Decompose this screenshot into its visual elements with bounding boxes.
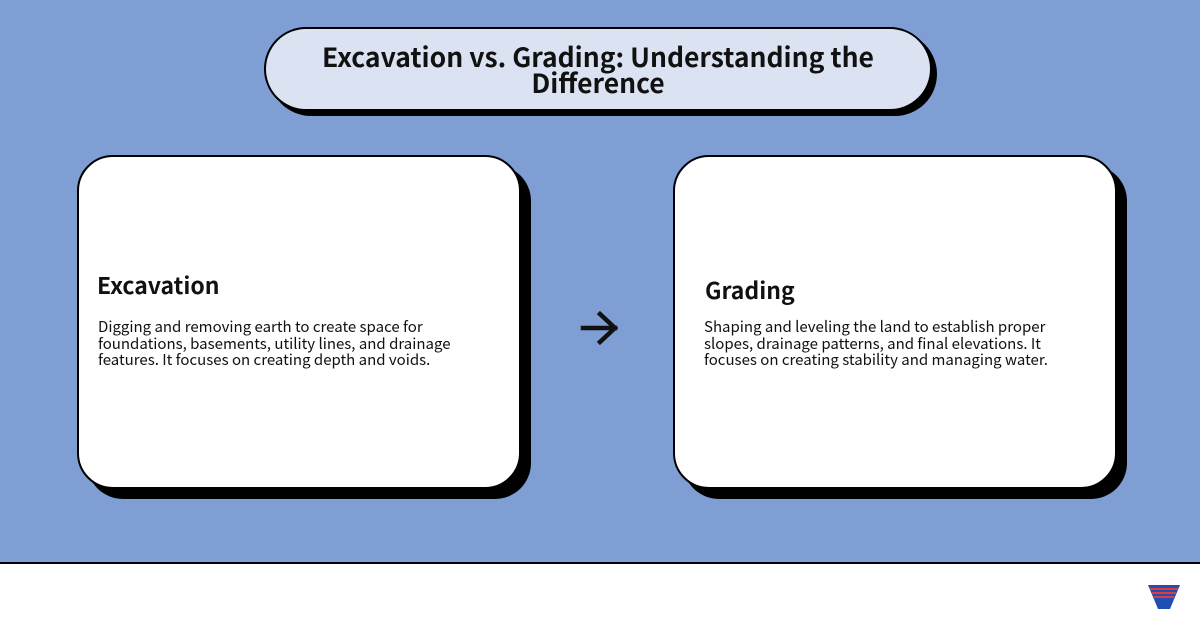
title pill: Excavation vs. Grading: Understanding the: [322, 36, 874, 75]
panel: excavation: [77, 155, 521, 489]
panel: grading: [673, 155, 1117, 489]
title pill: Difference: [531, 62, 665, 101]
heading: grading: Grading: [705, 272, 795, 306]
footer: [0, 562, 1200, 632]
text: grading description: Shaping and leveling the land to establish proper slopes, drainage patterns, and final elevations. It focuses on creating stability and managing water.: [704, 316, 1048, 370]
text: excavation description: Digging and removing earth to create space for foundations, basements, utility lines, and drainage features. It focuses on creating depth and voids.: [98, 316, 451, 370]
title pill: [264, 27, 932, 111]
heading: excavation: Excavation: [97, 267, 220, 301]
icon: logo: [1148, 585, 1180, 609]
arrow: [580, 310, 618, 346]
